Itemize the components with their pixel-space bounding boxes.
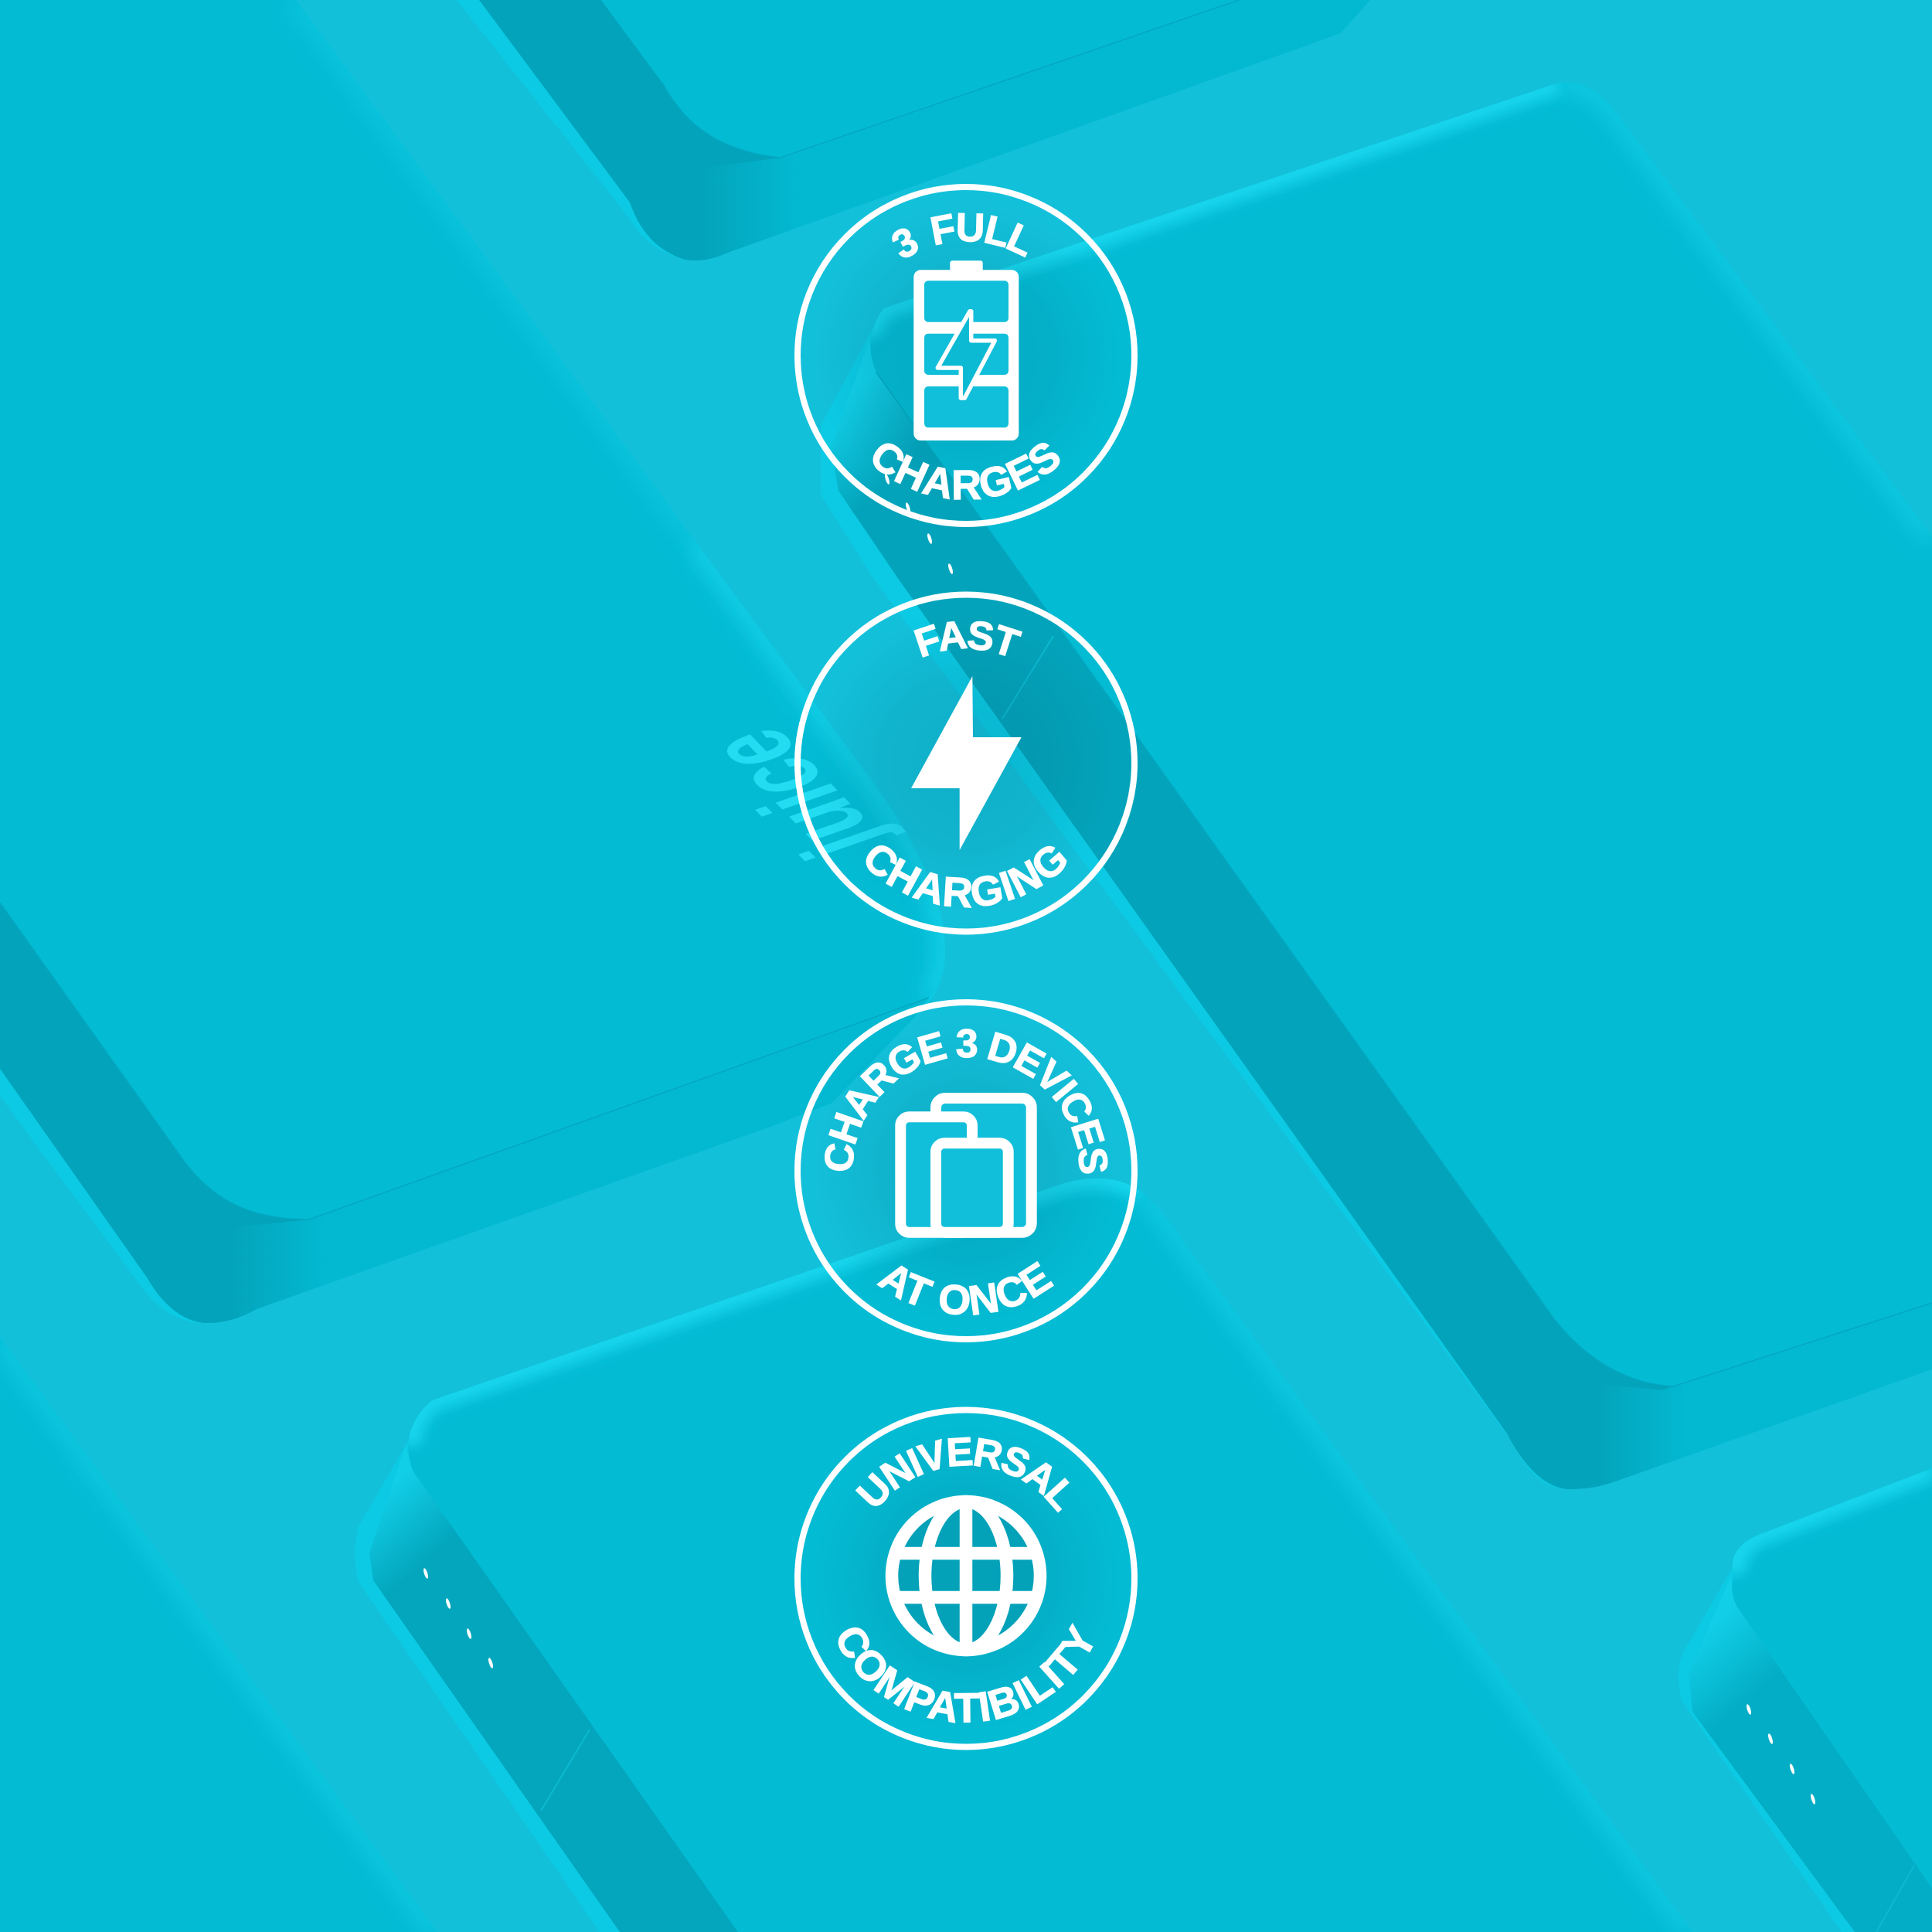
icon: globe (892, 1502, 1040, 1650)
badge: universal compatibility (794, 1406, 1138, 1750)
heading: universal: UNIVERSAL (855, 1437, 1070, 1513)
power bank: top (457, 0, 1370, 260)
label: charges: CHARGES (873, 443, 1060, 500)
logo: juice (680, 716, 907, 872)
power bank: bottom right (1679, 1468, 1932, 1932)
label: at once: AT ONCE (876, 1261, 1054, 1315)
label: compatibility: COMPATIBILITY (838, 1623, 1093, 1723)
heading: 3 full: 3 FULL (892, 213, 1028, 258)
status LEDs (884, 474, 954, 574)
icon: battery (913, 260, 1019, 440)
power bank: large left (0, 0, 945, 1323)
badge: charge 3 devices at once (794, 999, 1138, 1342)
heading: charge 3 devices: CHARGE 3 DEVICES (825, 1029, 1108, 1174)
status LEDs (423, 1568, 494, 1668)
heading: fast: FAST (913, 621, 1022, 658)
icon: lightning bolt (911, 676, 1022, 850)
badge: fast charging (794, 592, 1138, 935)
badge: 3 full charges (794, 184, 1138, 527)
power bank: large right (821, 83, 1932, 1489)
status LEDs (1746, 1704, 1816, 1804)
icon: three devices (900, 1098, 1032, 1233)
label: charging: CHARGING (866, 845, 1066, 908)
power bank: bottom centre (355, 1179, 1692, 1932)
power bank: bottom left (0, 1337, 437, 1932)
